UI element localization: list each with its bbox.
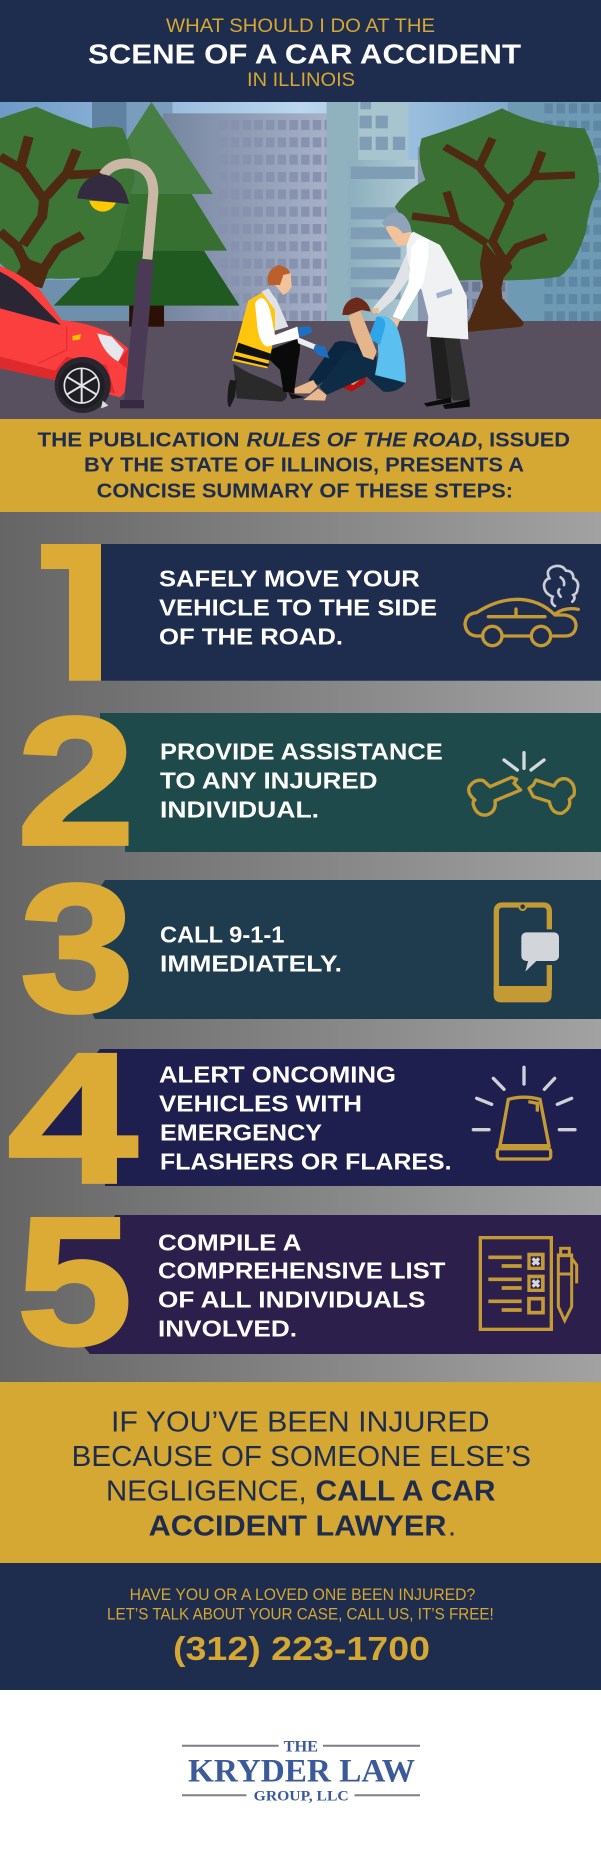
step 5 [17, 1181, 601, 1383]
call to action band [0, 1382, 601, 1563]
icon: phone with speech bubble [494, 903, 559, 1002]
illustration: accident scene [0, 100, 601, 419]
step 1 [41, 544, 601, 681]
intro band: BY THE STATE OF ILLINOIS, PRESENTS A [84, 455, 524, 477]
step 1 text [159, 566, 437, 650]
title line: what should I do: WHAT SHOULD I DO AT THE [166, 15, 435, 37]
contact band [0, 1563, 601, 1690]
call to action band: ACCIDENT LAWYER [149, 1511, 447, 1543]
logo: The Kryder Law Group [0, 1690, 601, 1864]
left tree [0, 107, 135, 288]
medic [227, 265, 329, 407]
step 2 text: TO ANY INJURED [160, 768, 378, 794]
step 2 text: PROVIDE ASSISTANCE [160, 738, 443, 764]
lamp [103, 163, 153, 259]
step 3 [20, 848, 601, 1050]
headlight [97, 333, 124, 362]
step 5 text: OF ALL INDIVIDUALS [158, 1286, 426, 1312]
step 1 text: OF THE ROAD. [159, 624, 343, 650]
step 4 text: EMERGENCY [160, 1120, 322, 1146]
injured person [294, 297, 406, 401]
car body [0, 266, 128, 397]
logo: The Kryder Law Group: KRYDER LAW [188, 1754, 415, 1790]
icon: broken bone [469, 753, 574, 815]
header band [0, 0, 601, 102]
numeral 2: 2 [17, 679, 135, 883]
numeral 1: 1 [41, 505, 130, 723]
right tree [395, 108, 599, 328]
step 5 text: INVOLVED. [158, 1316, 297, 1342]
step 5 text: COMPILE A [158, 1230, 302, 1256]
wheel [55, 357, 111, 413]
lamp post and car [0, 163, 154, 413]
title line: scene of a car accident: SCENE OF A CAR ACCIDENT [88, 38, 521, 70]
step 2 text [160, 738, 443, 823]
step 2 [17, 679, 601, 883]
numeral 5: 5 [17, 1181, 132, 1383]
contact band: HAVE YOU OR A LOVED ONE BEEN INJURED? [130, 1585, 475, 1604]
doctor [372, 213, 470, 409]
title line: in Illinois: IN ILLINOIS [247, 69, 355, 91]
step 1 text: SAFELY MOVE YOUR [159, 566, 420, 592]
step 4 text: FLASHERS OR FLARES. [160, 1149, 452, 1175]
intro band: THE PUBLICATION [38, 430, 240, 452]
step 3 text: CALL 9-1-1 [160, 922, 284, 948]
call to action band: NEGLIGENCE, [106, 1476, 307, 1508]
call to action band: CALL A CAR [316, 1476, 496, 1508]
numeral 4: 4 [8, 1015, 137, 1222]
icon: smoking car [465, 566, 578, 646]
phone number: (312) 223-1700 [173, 1631, 430, 1668]
step 3 text: IMMEDIATELY. [160, 951, 342, 977]
intro band: , ISSUED [477, 430, 570, 452]
step 5 text [158, 1230, 446, 1342]
icon: emergency beacon [473, 1067, 575, 1159]
pine tree [54, 102, 240, 327]
road [0, 321, 601, 419]
step 4 [8, 1015, 601, 1222]
step 4 text: ALERT ONCOMING [159, 1061, 396, 1087]
call to action band: BECAUSE OF SOMEONE ELSE’S [72, 1441, 531, 1473]
people [227, 213, 470, 409]
step 3 text [160, 922, 342, 977]
step 4 text: VEHICLES WITH [159, 1091, 362, 1117]
city background [0, 100, 601, 323]
numeral 3: 3 [20, 848, 134, 1050]
step 1 text: VEHICLE TO THE SIDE [159, 595, 437, 621]
gray gradient background [0, 512, 601, 1382]
logo: The Kryder Law Group: THE [284, 1739, 318, 1756]
step 5 text: COMPREHENSIVE LIST [158, 1258, 446, 1284]
intro band: RULES OF THE ROAD [246, 430, 477, 452]
step 2 text: INDIVIDUAL. [160, 797, 319, 823]
intro band: CONCISE SUMMARY OF THESE STEPS: [97, 480, 513, 502]
call to action band: . [448, 1511, 456, 1543]
contact band: LET’S TALK ABOUT YOUR CASE, CALL US, IT’S FREE! [107, 1604, 494, 1623]
intro band [0, 419, 601, 512]
logo: The Kryder Law Group: GROUP, LLC [254, 1789, 349, 1805]
icon: checklist and pen [480, 1238, 577, 1329]
step 4 text [159, 1061, 452, 1175]
numeral 1 [41, 544, 101, 681]
call to action band: IF YOU’VE BEEN INJURED [111, 1407, 490, 1439]
